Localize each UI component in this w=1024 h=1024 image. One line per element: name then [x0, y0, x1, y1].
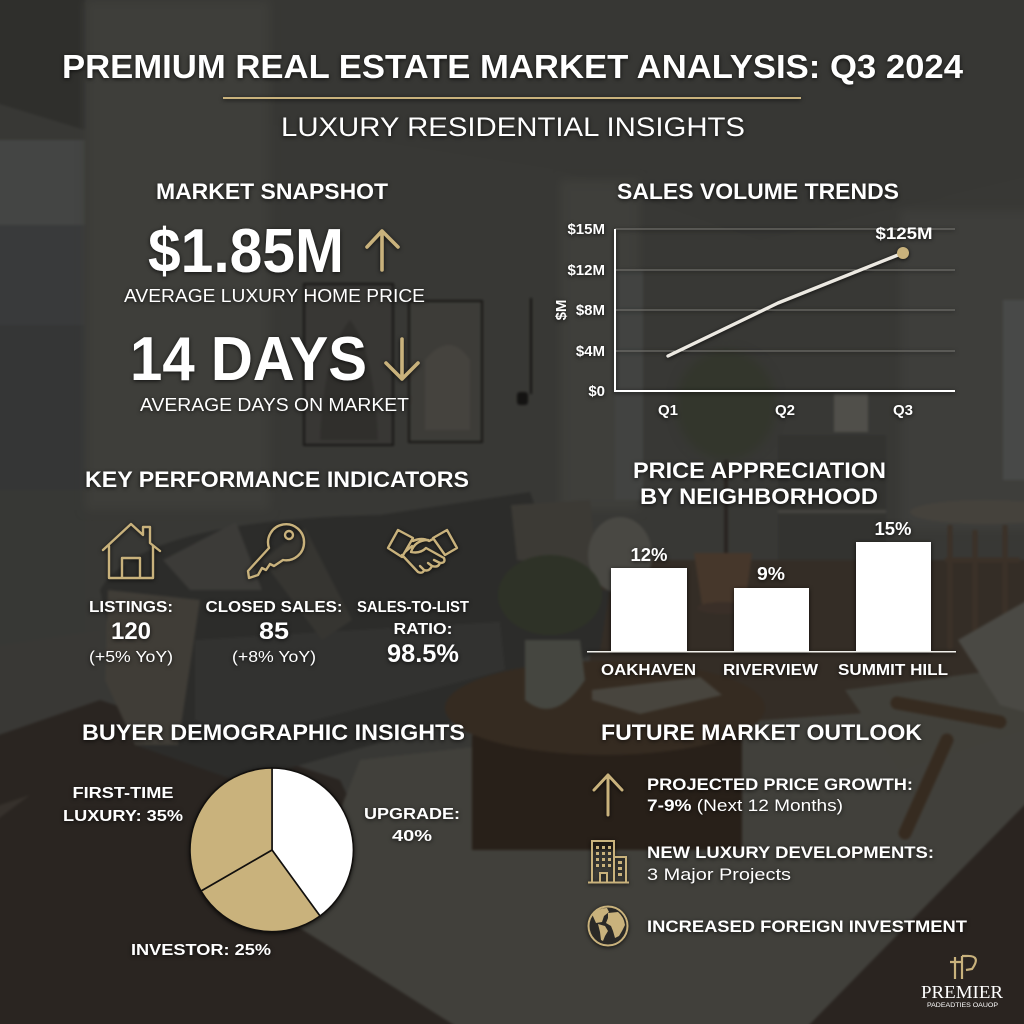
sofa seat	[195, 622, 505, 740]
books	[592, 677, 722, 714]
x axis labels: Q2	[775, 402, 795, 419]
icon: globe	[588, 906, 628, 946]
left curtains	[85, 0, 270, 510]
window frame lower	[0, 630, 100, 740]
x axis labels: Q1	[658, 402, 678, 419]
logo tagline: PADEADTIES OAUOP	[927, 1002, 998, 1009]
picture frames	[304, 284, 393, 445]
pie chart	[190, 768, 353, 932]
bar: Summit Hill	[838, 519, 948, 679]
bar: Riverview	[723, 564, 819, 679]
text: price growth: PROJECTED PRICE GROWTH:	[647, 775, 913, 794]
logo: Premier	[921, 956, 1003, 1009]
label: first-time luxury: FIRST-TIME	[72, 785, 174, 802]
heading: sales volume: SALES VOLUME TRENDS	[617, 179, 899, 204]
kpi: closed sales: CLOSED SALES:	[206, 599, 342, 616]
coffee table top	[445, 661, 765, 755]
y axis labels: $0	[588, 383, 605, 400]
icon: up arrow	[594, 775, 622, 815]
floor	[0, 700, 470, 1024]
label: first-time luxury: LUXURY: 35%	[63, 808, 183, 825]
y axis labels	[567, 221, 605, 400]
heading: price appreciation: PRICE APPRECIATION	[633, 458, 886, 483]
icon: gold down arrow	[386, 339, 418, 379]
label: days on market: AVERAGE DAYS ON MARKET	[140, 395, 409, 415]
trend line	[668, 253, 903, 356]
slice: investor 25%	[201, 850, 320, 932]
slice: upgrade 40%	[272, 768, 353, 916]
kpi: sales-to-list ratio: RATIO:	[394, 621, 452, 638]
kpi: closed sales	[206, 599, 342, 666]
text: new developments: 3 Major Projects	[647, 865, 791, 884]
y axis labels: $15M	[567, 221, 605, 238]
kpi: listings: 120	[111, 618, 151, 645]
pot plant	[724, 460, 728, 555]
y axis labels: $4M	[576, 343, 605, 360]
title block	[62, 48, 964, 142]
kpi: sales-to-list ratio	[357, 599, 469, 668]
text: price growth	[647, 775, 913, 815]
kpi: sales-to-list ratio: SALES-TO-LIST	[357, 599, 469, 616]
heading: market snapshot: MARKET SNAPSHOT	[156, 179, 389, 204]
icon: handshake	[388, 530, 457, 573]
end point	[897, 247, 909, 259]
kpi: closed sales: (+8% YoY)	[232, 649, 316, 666]
icon: buildings	[588, 841, 629, 882]
bar: Riverview: 9%	[757, 564, 785, 584]
sofa body	[100, 492, 610, 782]
stat: average price: $1.85M	[148, 217, 344, 286]
heading: price appreciation	[633, 458, 886, 509]
y axis title: $M	[553, 300, 570, 320]
panel: key performance indicators	[85, 467, 469, 668]
cushions	[163, 522, 262, 590]
ceiling	[85, 0, 1024, 240]
icon: house	[103, 524, 160, 578]
heading: outlook: FUTURE MARKET OUTLOOK	[601, 720, 922, 745]
left window	[0, 140, 85, 650]
logo mark	[950, 956, 976, 979]
kpi: sales-to-list ratio: 98.5%	[387, 640, 459, 668]
panel: future market outlook	[588, 720, 968, 946]
small framed photo	[834, 394, 868, 432]
label: average price: AVERAGE LUXURY HOME PRICE	[124, 286, 425, 306]
heading: KPIs: KEY PERFORMANCE INDICATORS	[85, 467, 469, 492]
dining set	[910, 500, 1024, 524]
bar: Oakhaven: OAKHAVEN	[601, 662, 696, 679]
kpi: closed sales: 85	[259, 618, 289, 645]
main title: PREMIUM REAL ESTATE MARKET ANALYSIS: Q3 2024	[62, 48, 964, 85]
x axis labels: Q3	[893, 402, 913, 419]
text: foreign investment: INCREASED FOREIGN INVESTMENT	[647, 917, 968, 936]
tulips	[498, 555, 602, 635]
left upper wall	[0, 0, 85, 130]
value label: $125M	[876, 224, 932, 243]
gold divider	[223, 97, 801, 99]
label: first-time luxury	[63, 785, 183, 825]
axes	[615, 229, 955, 391]
shelf	[778, 435, 886, 585]
bar: Oakhaven: 12%	[630, 545, 668, 565]
kpi: listings	[89, 599, 173, 666]
throw blanket	[105, 590, 200, 745]
panel: sales volume trends	[553, 179, 955, 419]
panel: market snapshot	[124, 179, 425, 415]
glass vase	[525, 640, 585, 709]
text: price growth: 7-9% (Next 12 Months)	[647, 796, 843, 815]
slice: first-time luxury 35%	[190, 768, 272, 891]
logo wordmark: PREMIER	[921, 982, 1003, 1002]
bar: Summit Hill: 15%	[874, 519, 912, 539]
text: new developments: NEW LUXURY DEVELOPMENTS:	[647, 843, 934, 862]
kpi: listings: (+5% YoY)	[89, 649, 173, 666]
label: investor: INVESTOR: 25%	[131, 942, 271, 959]
panel: buyer demographics	[63, 720, 465, 959]
wall lamp	[530, 298, 532, 394]
x axis labels	[658, 402, 913, 419]
y axis labels: $12M	[567, 262, 605, 279]
subtitle: LUXURY RESIDENTIAL INSIGHTS	[281, 112, 745, 142]
line chart	[553, 221, 955, 419]
label: upgrade	[364, 806, 460, 845]
rug	[295, 700, 1024, 1024]
coffee table base	[472, 735, 742, 850]
kpi: listings: LISTINGS:	[89, 599, 173, 616]
sheepskin	[588, 517, 652, 593]
icon: key	[248, 524, 304, 578]
far floor	[590, 560, 1024, 740]
y axis labels: $8M	[576, 302, 605, 319]
grid lines	[615, 229, 955, 351]
bar chart baseline	[587, 651, 956, 652]
label: upgrade: 40%	[392, 828, 432, 845]
heading: price appreciation: BY NEIGHBORHOOD	[640, 484, 878, 509]
bar: Riverview: RIVERVIEW	[723, 662, 819, 679]
heading: buyer demographics: BUYER DEMOGRAPHIC INSIGHTS	[82, 720, 465, 745]
icon: gold up arrow	[367, 231, 398, 270]
panel: price appreciation	[587, 458, 956, 679]
bar: Summit Hill: SUMMIT HILL	[838, 662, 948, 679]
text: new developments	[647, 843, 934, 884]
stat: days on market: 14 DAYS	[130, 325, 367, 394]
right armchair	[845, 670, 1024, 770]
label: upgrade: UPGRADE:	[364, 806, 460, 823]
right curtains and window	[560, 180, 640, 510]
plant foliage	[676, 350, 776, 460]
bar: Oakhaven	[601, 545, 696, 679]
